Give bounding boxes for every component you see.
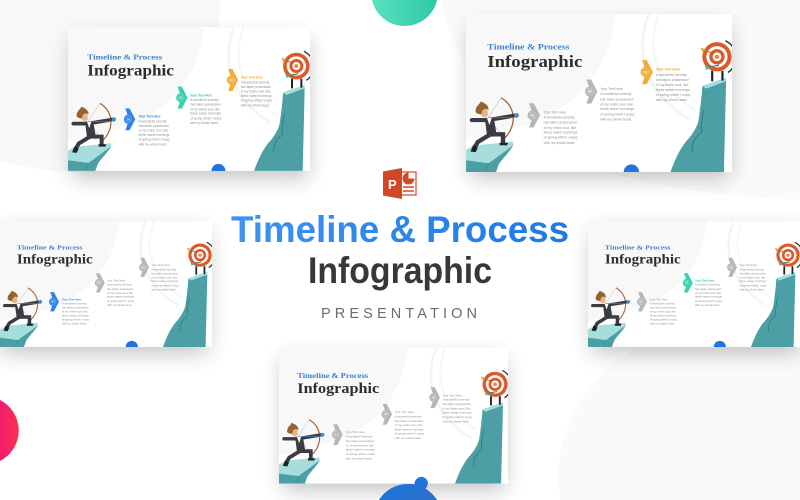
- slide 4: middle right: of my entire soul, like: [739, 275, 766, 279]
- slide 3: middle left: 01: [52, 300, 55, 304]
- slide 4: middle right: Timeline & Process: [605, 244, 671, 251]
- slide 5: bottom centre: has taken possession: [442, 402, 472, 406]
- slide 4: middle right: of spring which I enjoy: [650, 317, 678, 321]
- slide 2: top right: these sweet mornings: [544, 131, 578, 135]
- slide 5: bottom centre: 03: [432, 395, 436, 399]
- slide 3: middle left: of spring which I enjoy: [62, 317, 90, 321]
- slide 3: middle left: of spring which I enjoy: [151, 283, 179, 287]
- slide 1: top left: with my whole heart.: [190, 121, 219, 125]
- slide 3: middle left: these sweet mornings: [151, 279, 179, 283]
- slide 4: middle right: Your Text Here: [650, 297, 668, 301]
- slide 2: top right: with my whole heart.: [544, 141, 575, 145]
- slide 4: middle right: with my whole heart.: [695, 303, 720, 307]
- slide 5: bottom centre: has taken possession: [395, 419, 424, 423]
- slide 5: bottom centre: of my entire soul, like: [395, 423, 423, 427]
- slide 4: middle right: these sweet mornings: [650, 313, 677, 317]
- slide 5: bottom centre: Infographic: [297, 381, 380, 397]
- slide 1: top left: of my entire soul, like: [190, 107, 220, 111]
- slide 1: top left: has taken possession: [139, 124, 169, 128]
- slide 5: bottom centre: of my entire soul, like: [442, 407, 471, 411]
- slide 2: top right: has taken possession: [600, 97, 634, 101]
- slide 4: middle right: Your Text Here: [739, 263, 758, 267]
- slide 1: top left: Timeline & Process: [87, 52, 162, 61]
- slide 1: top left: has taken possession: [241, 85, 271, 89]
- slide 3: middle left: Infographic: [17, 251, 93, 266]
- slide 4: middle right: with my whole heart.: [650, 322, 675, 326]
- slide 3: middle left: Your Text Here: [151, 263, 170, 267]
- slide 2: top right: these sweet mornings: [600, 107, 634, 111]
- slide 4: middle right: with my whole heart.: [739, 287, 765, 291]
- slide 1: top left: Your Text Here: [190, 93, 212, 97]
- slide 5: bottom centre: [279, 347, 512, 500]
- slide 2: top right: Your Text Here: [600, 87, 623, 91]
- slide 3: middle left: of my entire soul, like: [107, 291, 133, 295]
- slide 4: middle right: of spring which I enjoy: [739, 283, 767, 287]
- slide 4: middle right: has taken possession: [739, 271, 766, 275]
- slide 1: top left: of spring which I enjoy: [139, 138, 170, 142]
- slide 4: middle right: 02: [685, 281, 689, 285]
- slide 2: top right: Your Text Here: [544, 110, 566, 114]
- slide 2: top right: Timeline & Process: [487, 42, 570, 51]
- slide 1: top left: of spring which I enjoy: [241, 99, 272, 103]
- slide 1: top left: these sweet mornings: [241, 94, 272, 98]
- slide 3: middle left: A wonderful serenity: [62, 301, 87, 305]
- slide 3: middle left: these sweet mornings: [107, 295, 135, 299]
- slide 1: top left: [68, 27, 314, 178]
- slide 4: middle right: [588, 221, 800, 353]
- slide 5: bottom centre: with my whole heart.: [395, 436, 422, 440]
- slide 3: middle left: has taken possession: [62, 305, 89, 309]
- circle: red left: [0, 400, 19, 461]
- slide 5: bottom centre: A wonderful serenity: [442, 398, 470, 402]
- slide 2: top right: of spring which I enjoy: [656, 93, 690, 97]
- slide 5: bottom centre: with my whole heart.: [442, 419, 470, 423]
- slide 1: top left: has taken possession: [190, 103, 221, 107]
- slide 4: middle right: A wonderful serenity: [650, 301, 675, 305]
- icon: PowerPoint logo: [383, 168, 416, 199]
- circle: small blue accent: [414, 478, 428, 490]
- slide 3: middle left: Your Text Here: [107, 279, 126, 283]
- slide 1: top left: of my entire soul, like: [241, 90, 271, 94]
- slide 5: bottom centre: of my entire soul, like: [346, 443, 374, 447]
- slide 3: middle left: 03: [142, 265, 145, 269]
- slide 5: bottom centre: of spring which I enjoy: [442, 415, 473, 419]
- slide 1: top left: of spring which I enjoy: [190, 116, 222, 120]
- slide 3: middle left: 02: [97, 281, 101, 285]
- slide 4: middle right: A wonderful serenity: [739, 267, 765, 271]
- slide 3: middle left: A wonderful serenity: [107, 283, 133, 287]
- circle: blue bottom: [379, 484, 437, 500]
- slide 5: bottom centre: Your Text Here: [395, 410, 415, 414]
- slide 2: top right: A wonderful serenity: [600, 92, 632, 96]
- slide 2: top right: these sweet mornings: [656, 88, 690, 92]
- slide 1: top left: Your Text Here: [241, 76, 263, 80]
- slide 3: middle left: Timeline & Process: [17, 244, 83, 251]
- slide 2: top right: 02: [588, 90, 592, 94]
- slide 2: top right: of spring which I enjoy: [544, 136, 578, 140]
- main subtitle: Infographic: [308, 250, 492, 291]
- slide 1: top left: these sweet mornings: [139, 133, 170, 137]
- slide 2: top right: of my entire soul, like: [600, 102, 633, 106]
- slide 1: top left: with my whole heart.: [139, 142, 167, 146]
- icon: PowerPoint logo: P: [388, 177, 397, 192]
- slide 1: top left: 03: [230, 78, 233, 82]
- slide 2: top right: has taken possession: [544, 121, 577, 125]
- slide 5: bottom centre: A wonderful serenity: [346, 435, 373, 439]
- slide 4: middle right: these sweet mornings: [695, 295, 723, 299]
- slide 1: top left: Infographic: [87, 62, 174, 79]
- slide 5: bottom centre: 02: [384, 412, 388, 416]
- slide 2: top right: of my entire soul, like: [656, 83, 689, 87]
- slide 3: middle left: Your Text Here: [62, 297, 82, 301]
- slide 4: middle right: of my entire soul, like: [695, 291, 721, 295]
- slide 2: top right: 03: [644, 70, 648, 74]
- slide 5: bottom centre: 01: [335, 433, 338, 437]
- slide 2: top right: A wonderful serenity: [544, 116, 575, 120]
- slide 5: bottom centre: Timeline & Process: [297, 373, 369, 380]
- slide 5: bottom centre: Your Text Here: [346, 430, 366, 434]
- slide 5: bottom centre: these sweet mornings: [346, 447, 375, 451]
- slide 3: middle left: these sweet mornings: [62, 313, 89, 317]
- slide 4: middle right: of spring which I enjoy: [695, 299, 723, 303]
- slide 4: middle right: these sweet mornings: [739, 279, 767, 283]
- slide 1: top left: Your Text Here: [139, 115, 161, 119]
- slide 3: middle left: [0, 221, 215, 353]
- slide 3: middle left: has taken possession: [151, 271, 178, 275]
- slide 2: top right: with my whole heart.: [656, 98, 688, 102]
- slide 2: top right: A wonderful serenity: [656, 73, 687, 77]
- slide 5: bottom centre: these sweet mornings: [395, 427, 424, 431]
- slide 4: middle right: of my entire soul, like: [650, 310, 676, 314]
- slide 5: bottom centre: of spring which I enjoy: [346, 452, 376, 456]
- slide 2: top right: Your Text Here: [656, 68, 680, 72]
- slide 3: middle left: with my whole heart.: [62, 322, 87, 326]
- slide 1: top left: of my entire soul, like: [139, 129, 168, 133]
- slide 2: top right: [466, 14, 736, 180]
- slide 5: bottom centre: with my whole heart.: [346, 456, 373, 460]
- slide 2: top right: with my whole heart.: [600, 117, 632, 121]
- slide 5: bottom centre: Your Text Here: [442, 393, 462, 397]
- slide 4: middle right: Infographic: [605, 251, 681, 266]
- slide 4: middle right: 03: [730, 265, 733, 269]
- slide 4: middle right: Your Text Here: [695, 279, 715, 283]
- slide 5: bottom centre: these sweet mornings: [442, 411, 472, 415]
- slide 1: top left: with my whole heart.: [241, 103, 270, 107]
- slide 3: middle left: of spring which I enjoy: [107, 299, 135, 303]
- slide 4: middle right: has taken possession: [650, 305, 677, 309]
- slide 1: top left: A wonderful serenity: [190, 98, 219, 102]
- slide 3: middle left: with my whole heart.: [151, 287, 177, 291]
- slide 4: middle right: 01: [640, 300, 643, 304]
- slide 5: bottom centre: has taken possession: [346, 439, 375, 443]
- slide 3: middle left: of my entire soul, like: [151, 275, 178, 279]
- tagline: PRESENTATION: [321, 306, 477, 322]
- slide 2: top right: has taken possession: [656, 78, 689, 82]
- slide 1: top left: A wonderful serenity: [139, 119, 167, 123]
- slide 2: top right: Infographic: [487, 52, 583, 71]
- slide 5: bottom centre: of spring which I enjoy: [395, 432, 425, 436]
- slide 3: middle left: has taken possession: [107, 287, 134, 291]
- slide 1: top left: 02: [179, 96, 183, 100]
- slide 2: top right: of my entire soul, like: [544, 126, 576, 130]
- slide 3: middle left: of my entire soul, like: [62, 310, 88, 314]
- main title: Timeline & Process: [231, 209, 569, 250]
- slide 3: middle left: with my whole heart.: [107, 303, 132, 307]
- slide 1: top left: A wonderful serenity: [241, 80, 270, 84]
- slide 4: middle right: A wonderful serenity: [695, 283, 721, 287]
- slide 4: middle right: has taken possession: [695, 287, 722, 291]
- slide 1: top left: 01: [127, 117, 131, 121]
- slide 1: top left: these sweet mornings: [190, 112, 221, 116]
- slide 2: top right: of spring which I enjoy: [600, 112, 635, 116]
- circle: teal top: [372, 0, 437, 26]
- slide 2: top right: 01: [531, 113, 535, 117]
- slide 5: bottom centre: A wonderful serenity: [395, 414, 422, 418]
- slide 3: middle left: A wonderful serenity: [151, 267, 177, 271]
